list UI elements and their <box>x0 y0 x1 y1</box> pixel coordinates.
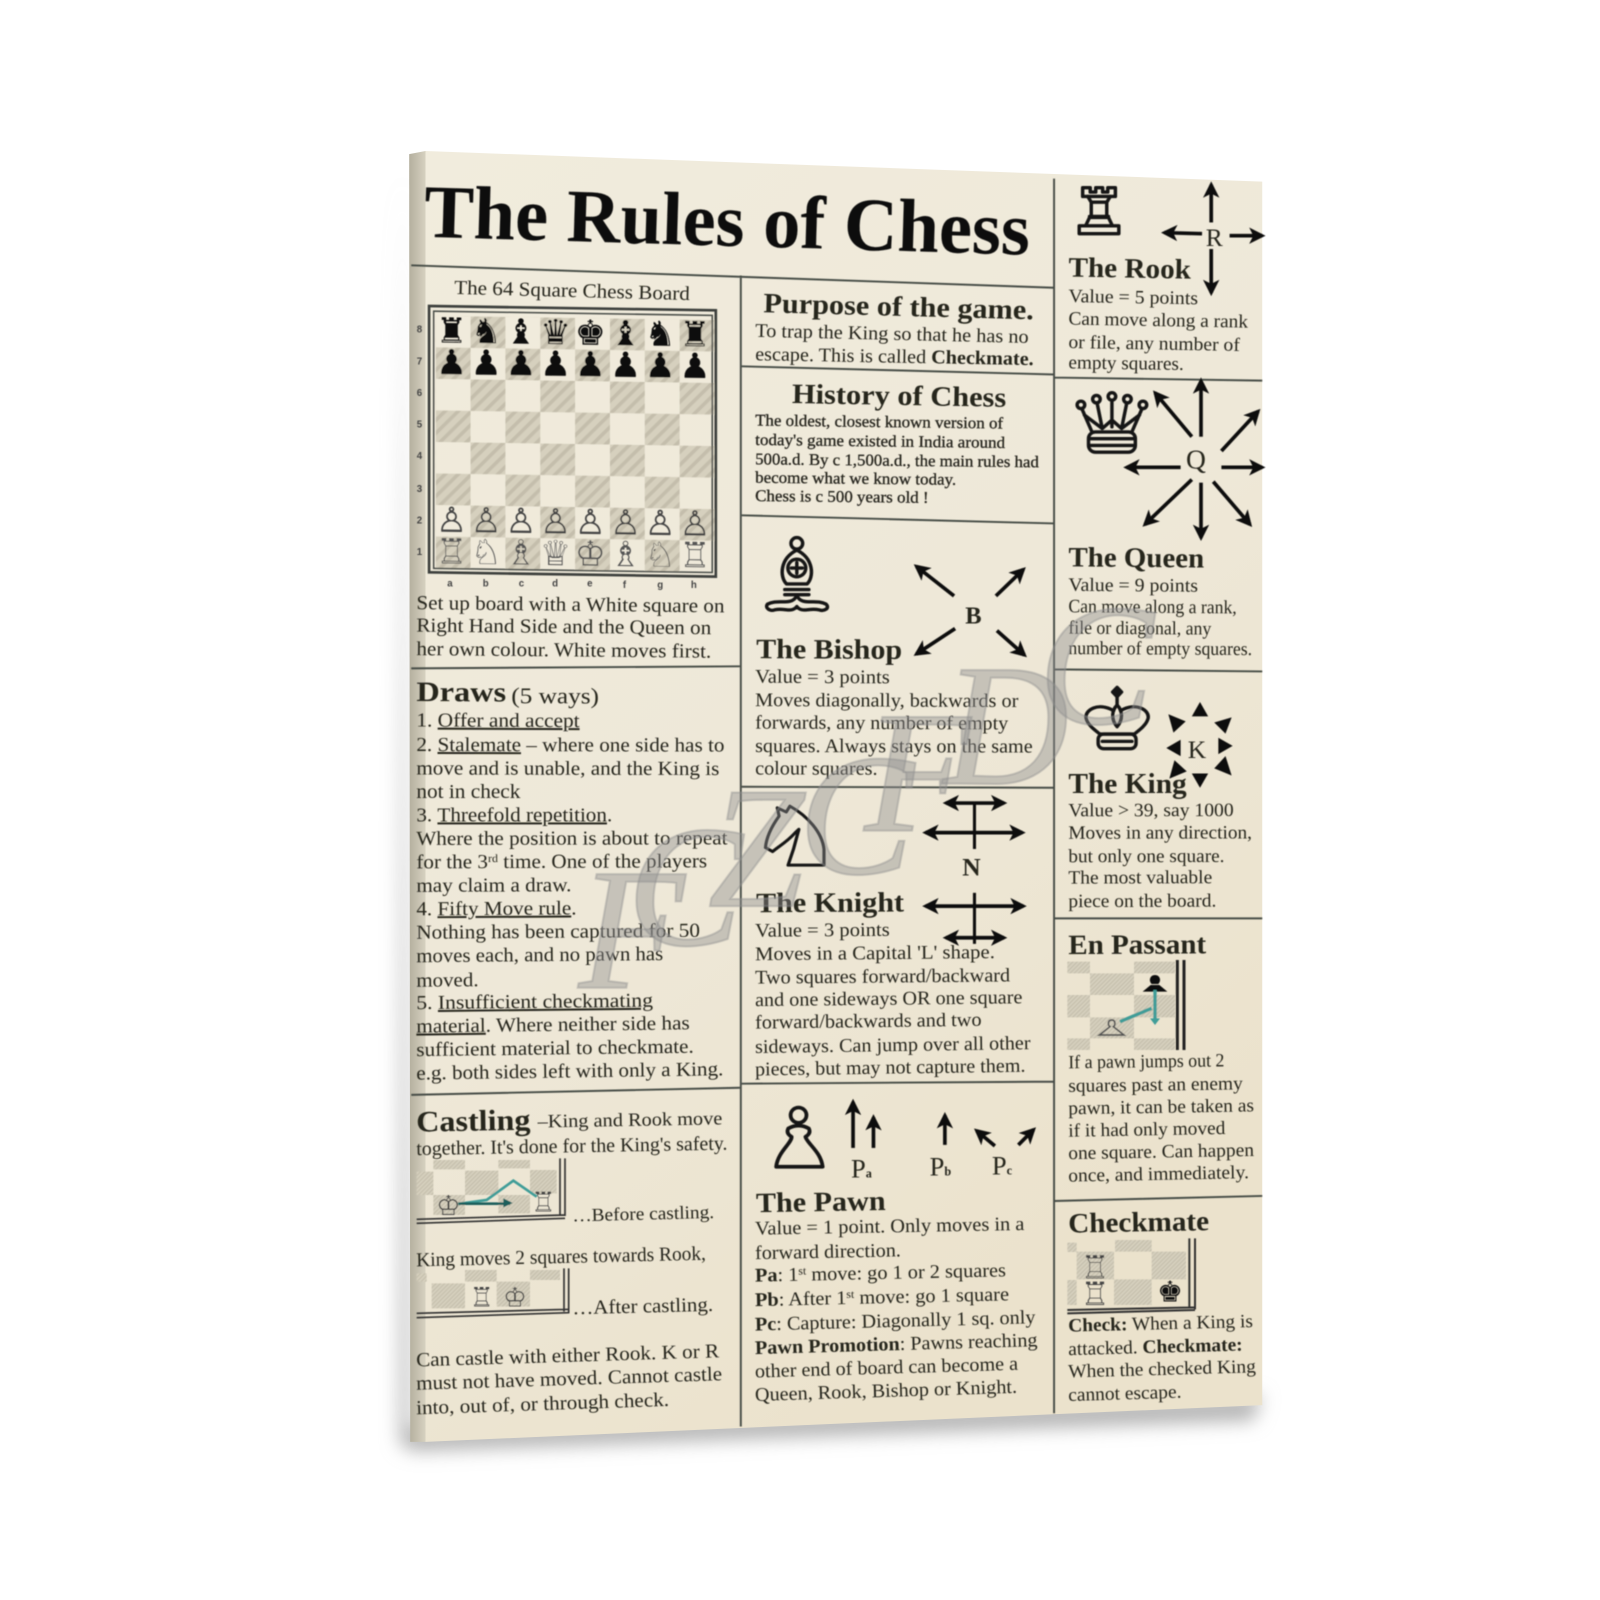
grid lines <box>411 179 1262 1427</box>
bishop heading: The Bishop <box>756 634 902 666</box>
file labels: c <box>519 579 525 590</box>
draws list: material. Where neither side has <box>416 1012 690 1038</box>
queen heading: The Queen <box>1068 542 1205 575</box>
board setup text <box>416 592 725 663</box>
panel: the bishop <box>755 538 1033 780</box>
canvas front poster <box>426 151 1262 1442</box>
queen text: number of empty squares. <box>1068 638 1252 660</box>
diagram: before castling <box>417 1158 565 1223</box>
draws list: may claim a draw. <box>416 874 571 897</box>
diagram: checkmate: ♚ <box>1157 1275 1183 1309</box>
draws list: not in check <box>416 781 520 803</box>
icon: rook <box>1079 188 1119 234</box>
panel: en passant <box>1067 929 1255 1187</box>
pawn text: st <box>846 1289 855 1301</box>
rook text: empty squares. <box>1068 352 1184 375</box>
knight move arrows: N <box>962 853 981 882</box>
castling conditions: into, out of, or through check. <box>416 1389 669 1419</box>
history text: become what we know today. <box>755 468 956 489</box>
knight text <box>755 920 1031 1081</box>
panel: the knight <box>755 803 1031 1081</box>
bishop text <box>755 667 1033 780</box>
panel: history of chess <box>755 379 1039 507</box>
history heading: History of Chess <box>792 379 1007 414</box>
queen move arrows: Q <box>1186 443 1206 474</box>
en passant heading: En Passant <box>1068 929 1207 961</box>
purpose text: To trap the King so that he has no <box>755 321 1029 348</box>
castling conditions: must not have moved. Cannot castle <box>416 1363 723 1395</box>
king text <box>1068 800 1252 912</box>
draws list: for the 3 <box>416 851 484 873</box>
file labels: g <box>657 580 663 591</box>
draws list: time. One of the players <box>498 850 707 873</box>
rook move arrows: R <box>1206 223 1223 252</box>
king move arrows <box>1166 702 1233 788</box>
icon: knight <box>765 806 824 865</box>
castling conditions <box>416 1340 723 1419</box>
pawn heading: The Pawn <box>756 1186 886 1219</box>
pawn text: move: go 1 or 2 squares <box>806 1260 1006 1286</box>
pawn text: Queen, Rook, Bishop or Knight. <box>755 1377 1017 1406</box>
king heading: The King <box>1068 769 1187 800</box>
chess board with pieces: ♜♞♝♛♚♝♞♜ <box>436 311 710 355</box>
queen text: Can move along a rank, <box>1068 596 1237 618</box>
watermark: FCZCFDC <box>578 568 1156 1026</box>
king text: The most valuable <box>1068 867 1212 889</box>
knight text: Moves in a Capital 'L' shape. <box>755 942 995 965</box>
panel: castling <box>416 1105 728 1419</box>
file labels: b <box>483 579 489 590</box>
queen move arrows <box>1127 381 1262 538</box>
pawn text: Pb: After 1 <box>755 1288 844 1311</box>
file labels: d <box>552 579 558 590</box>
pawn move arrows: Pb <box>930 1152 951 1182</box>
pawn text: move: go 1 square <box>854 1284 1009 1309</box>
checkmate text: attacked. Checkmate: <box>1068 1335 1243 1360</box>
diagram: before castling: ♔ <box>436 1191 461 1222</box>
panel: the pawn <box>755 1102 1038 1406</box>
panel: draws <box>416 677 728 1085</box>
pawn move arrows: Pc <box>992 1150 1013 1180</box>
purpose heading: Purpose of the game. <box>763 288 1034 326</box>
knight text: Two squares forward/backward <box>755 965 1011 989</box>
panel: checkmate <box>1067 1206 1257 1406</box>
draws list: 5. Insufficient checkmating <box>416 990 653 1014</box>
bishop text: squares. Always stays on the same <box>755 736 1033 758</box>
board setup text: Set up board with a White square on <box>416 592 725 617</box>
rank labels: 5 <box>417 420 423 431</box>
king move arrows: K <box>1188 735 1207 764</box>
panel: the rook <box>1068 185 1262 375</box>
diagram: checkmate: ♖ <box>1081 1248 1109 1286</box>
chess board with pieces <box>429 306 716 577</box>
draws list: e.g. both sides left with only a King. <box>416 1058 724 1085</box>
diagram: before castling: ♖ <box>531 1188 556 1219</box>
rank labels: 6 <box>417 388 423 399</box>
knight text: and one sideways OR one square <box>755 987 1022 1011</box>
diagram: after castling: ♔ <box>503 1283 527 1314</box>
icon: king <box>1086 687 1148 749</box>
history text: 500a.d. By c 1,500a.d., the main rules had <box>755 449 1039 471</box>
bishop text: Value = 3 points <box>755 667 890 688</box>
draws list: 3. Threefold repetition . <box>416 804 612 826</box>
knight heading: The Knight <box>756 887 905 919</box>
file labels <box>447 579 697 591</box>
knight text: Value = 3 points <box>755 920 890 942</box>
rank labels <box>417 325 423 558</box>
title: The Rules of Chess <box>423 171 1031 272</box>
pawn text: Value = 1 point. Only moves in a <box>755 1214 1025 1240</box>
board setup text: her own colour. White moves first. <box>416 638 711 663</box>
queen text <box>1068 575 1252 660</box>
bishop move arrows <box>916 566 1024 655</box>
draws list: move and is unable, and the King is <box>416 757 720 780</box>
history text: The oldest, closest known version of <box>755 411 1004 433</box>
castling heading: Castling <box>416 1105 531 1139</box>
draws list: 1. Offer and accept <box>416 710 580 732</box>
draws list: 4. Fifty Move rule . <box>416 897 577 920</box>
king text: piece on the board. <box>1068 891 1216 912</box>
rook heading: The Rook <box>1068 253 1192 286</box>
checkmate text <box>1068 1311 1257 1406</box>
canvas side edge <box>409 151 426 1442</box>
king text: but only one square. <box>1068 846 1224 867</box>
queen text: Value = 9 points <box>1068 575 1198 597</box>
draws heading: (5 ways) <box>511 683 599 709</box>
history text: Chess is c 500 years old ! <box>755 486 929 507</box>
en passant text: pawn, it can be taken as <box>1068 1095 1254 1119</box>
chess board with pieces: ♖♘♗♕♔♗♘♖ <box>436 532 710 576</box>
rank labels: 7 <box>417 356 422 367</box>
rook text: Can move along a rank <box>1068 308 1249 333</box>
pawn text: st <box>798 1265 807 1278</box>
checkmate text: When the checked King <box>1068 1356 1257 1383</box>
castling heading <box>416 1105 723 1139</box>
diagram: checkmate <box>1067 1238 1195 1313</box>
panel: chess board <box>416 277 725 663</box>
board caption: The 64 Square Chess Board <box>454 277 690 305</box>
king text: Value > 39, say 1000 <box>1068 800 1234 821</box>
icon: bishop <box>767 538 827 610</box>
en passant text: one square. Can happen <box>1068 1140 1255 1164</box>
before castling caption: …Before castling. <box>572 1202 714 1225</box>
castling intro: together. It's done for the King's safety. <box>416 1133 728 1160</box>
chess board with pieces: ♟♟♟♟♟♟♟♟ <box>436 343 710 387</box>
rook text: or file, any number of <box>1068 332 1241 356</box>
pawn text: Pc: Capture: Diagonally 1 sq. only <box>755 1307 1036 1336</box>
castling heading: –King and Rook move <box>536 1108 723 1133</box>
bishop text: forwards, any number of empty <box>755 713 1009 734</box>
panel: the king <box>1068 687 1252 912</box>
rook move arrows <box>1164 185 1262 293</box>
draws list: Nothing has been captured for 50 <box>416 920 700 944</box>
knight text: sideways. Can jump over all other <box>755 1033 1031 1058</box>
board setup text: Right Hand Side and the Queen on <box>416 615 711 639</box>
pawn move arrows: Pa <box>851 1154 872 1184</box>
file labels: a <box>447 579 453 590</box>
purpose text <box>755 321 1034 370</box>
file labels: f <box>623 580 627 591</box>
draws list: moves each, and no pawn has <box>416 943 664 967</box>
rank labels: 8 <box>417 325 423 336</box>
diagram: checkmate: ♖ <box>1081 1275 1109 1313</box>
icon: queen <box>1077 393 1147 452</box>
knight text: pieces, but may not capture them. <box>755 1056 1026 1081</box>
chess board with pieces: ♙♙♙♙♙♙♙♙ <box>436 501 710 545</box>
pawn text: Pa: 1 <box>755 1265 798 1287</box>
purpose text: escape. This is called Checkmate. <box>755 344 1034 370</box>
checkmate text: cannot escape. <box>1068 1382 1182 1406</box>
pawn text: other end of board can become a <box>755 1354 1019 1383</box>
history text <box>755 411 1039 507</box>
king moves text: King moves 2 squares towards Rook, <box>416 1243 706 1271</box>
history text: today's game existed in India around <box>755 430 1005 452</box>
king text: Moves in any direction, <box>1068 822 1252 844</box>
panel: the queen <box>1068 381 1262 660</box>
diagram: en passant <box>1067 960 1184 1050</box>
rook text <box>1068 286 1249 375</box>
draws list: sufficient material to checkmate. <box>416 1036 694 1061</box>
draws list: 2. Stalemate – where one side has to <box>416 734 725 757</box>
draws list <box>416 710 728 1085</box>
draws heading: Draws <box>416 677 506 708</box>
panel: purpose of the game <box>755 288 1034 370</box>
file labels: h <box>691 580 697 591</box>
diagram: after castling <box>417 1268 569 1318</box>
pawn text <box>755 1214 1038 1406</box>
rank labels: 4 <box>417 451 423 462</box>
icon: pawn <box>776 1108 823 1167</box>
draws heading <box>416 677 599 709</box>
en passant text: squares past an enemy <box>1068 1073 1243 1097</box>
after castling caption: …After castling. <box>572 1294 713 1319</box>
draws list: rd <box>488 853 498 865</box>
file labels: e <box>587 579 593 590</box>
pawn move arrows <box>851 1102 1034 1184</box>
draws list: Where the position is about to repeat <box>416 827 728 850</box>
rank labels: 1 <box>417 547 423 558</box>
bishop text: colour squares. <box>755 758 878 780</box>
pawn text: forward direction. <box>755 1240 901 1264</box>
en passant text <box>1068 1050 1255 1187</box>
diagram: after castling: ♖ <box>470 1283 494 1314</box>
bishop move arrows: B <box>965 602 982 629</box>
knight text: forward/backwards and two <box>755 1010 982 1034</box>
rank labels: 3 <box>417 484 423 495</box>
castling conditions: Can castle with either Rook. K or R <box>416 1340 720 1371</box>
en passant text: if it had only moved <box>1068 1118 1226 1142</box>
rank labels: 2 <box>417 515 422 526</box>
canvas shadow <box>400 173 1262 1451</box>
en passant text: If a pawn jumps out 2 <box>1068 1050 1225 1073</box>
rook text: Value = 5 points <box>1068 286 1198 309</box>
checkmate heading: Checkmate <box>1068 1206 1209 1240</box>
draws list: moved. <box>416 969 479 992</box>
bishop text: Moves diagonally, backwards or <box>755 690 1019 712</box>
queen text: file or diagonal, any <box>1068 618 1212 640</box>
checkmate text: Check: When a King is <box>1068 1311 1253 1337</box>
pawn text: Pawn Promotion : Pawns reaching <box>755 1330 1038 1359</box>
en passant text: once, and immediately. <box>1068 1162 1249 1187</box>
